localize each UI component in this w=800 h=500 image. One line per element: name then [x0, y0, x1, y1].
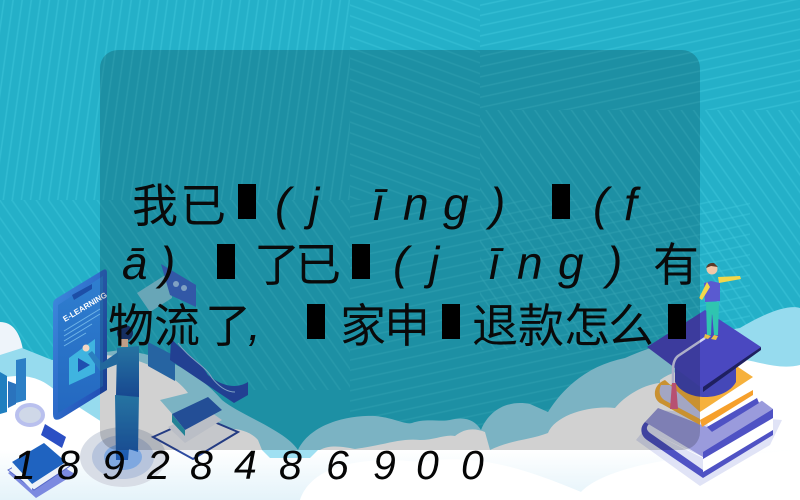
dark translucent panel: [100, 50, 700, 450]
title, line 2: 了已: [254, 239, 341, 291]
lower book: [641, 422, 773, 478]
title, line 2: ā): [122, 237, 175, 289]
title, line 2: (jīng): [393, 237, 622, 289]
upper book: [655, 380, 700, 425]
stack of books, left: [8, 443, 75, 498]
chat bubbles: [137, 264, 196, 312]
stack of books and cap, right: [636, 310, 782, 486]
title, line 2: [122, 237, 699, 291]
title, line 3: 家申: [340, 300, 430, 352]
title, line 2: 有: [653, 239, 699, 291]
video card: [69, 339, 95, 385]
phone label: E-LEARNING: [61, 290, 109, 324]
title, line 3: [108, 298, 686, 352]
phone number: 18928486900: [13, 442, 484, 488]
title, line 3: ,: [248, 298, 261, 350]
title, line 1: (f: [593, 178, 641, 230]
illustration: bar chart: [0, 358, 26, 414]
envelope and wave chart: [148, 338, 248, 403]
person: [82, 325, 139, 460]
title, line 1: [132, 178, 641, 232]
ripple base: [80, 427, 166, 487]
title, line 1: 我已: [132, 180, 226, 232]
phone: [53, 269, 109, 420]
stack of books, centre: [153, 397, 238, 459]
title, line 3: 退款怎么: [472, 300, 654, 352]
icon: magnifier: [17, 405, 66, 448]
clouds: [0, 307, 800, 500]
small standing figure: [699, 263, 741, 340]
title, line 3: 物流了: [108, 300, 251, 352]
title, line 1: (jīng): [275, 178, 505, 230]
cap: [675, 362, 736, 397]
